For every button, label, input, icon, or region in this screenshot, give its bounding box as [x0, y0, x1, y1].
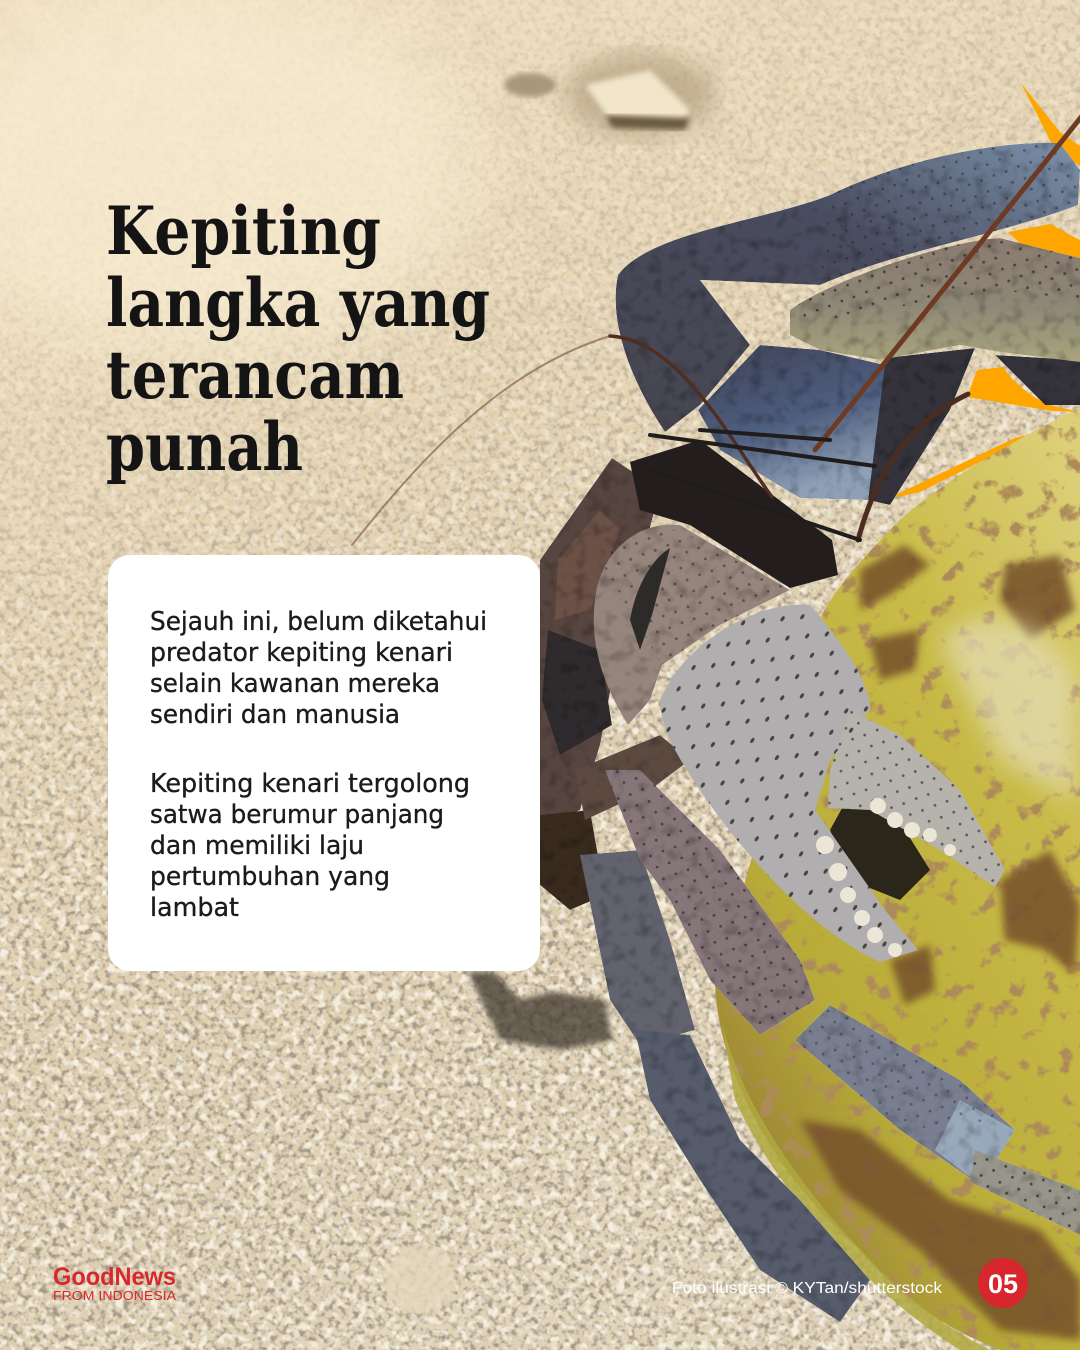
- paragraph 2: pertumbuhan yang: [150, 862, 390, 892]
- paragraph 2: lambat: [150, 893, 239, 923]
- crab antennae: [352, 116, 1080, 545]
- crab blue plate: [698, 345, 885, 500]
- paragraph 1: sendiri dan manusia: [150, 700, 400, 730]
- paragraph 2: Kepiting kenari tergolong: [150, 769, 470, 799]
- arm segment dark stripe: [630, 548, 670, 650]
- title: langka yang: [106, 264, 490, 342]
- crab second upper limb: [790, 238, 1080, 362]
- paragraph 2: dan memiliki laju: [150, 831, 364, 861]
- crab mouthparts: [630, 440, 838, 588]
- paragraph 1: predator kepiting kenari: [150, 638, 453, 668]
- claw teeth: [816, 798, 956, 957]
- logo: GoodNews from Indonesia: GoodNews: [53, 1263, 176, 1291]
- decorative orange starburst behind crab: [887, 83, 1080, 499]
- paragraph 2: [150, 769, 470, 923]
- logo: GoodNews from Indonesia: [53, 1263, 176, 1303]
- photo credit: Foto ilustrasi © KYTan/shutterstock: [672, 1280, 943, 1297]
- crab body (dark rear section): [540, 458, 690, 910]
- title: terancam: [106, 336, 404, 414]
- crab big claw: [660, 605, 1005, 962]
- page number badge: [978, 1258, 1028, 1308]
- page number badge: 05: [988, 1269, 1018, 1299]
- logo: GoodNews from Indonesia: FROM INDONESIA: [53, 1288, 176, 1303]
- crab lower legs: [580, 770, 1080, 1322]
- crab arm segment: [594, 524, 790, 725]
- dark underside of legs: [868, 348, 1080, 505]
- paragraph 1: selain kawanan mereka: [150, 669, 440, 699]
- crab: textured silhouette: [540, 143, 1080, 1322]
- title: Kepiting: [106, 192, 381, 270]
- paragraph 2: satwa berumur panjang: [150, 800, 444, 830]
- leg and limb bristle dots: [600, 143, 1080, 1235]
- paragraph 1: [150, 607, 487, 730]
- white text card: [108, 555, 540, 971]
- coconut: [700, 400, 1080, 1350]
- crab upper claw arm: [616, 143, 1080, 432]
- title: [106, 192, 490, 486]
- paragraph 1: Sejauh ini, belum diketahui: [150, 607, 487, 637]
- crab shadow on sand: [468, 972, 612, 1050]
- title: punah: [106, 408, 303, 486]
